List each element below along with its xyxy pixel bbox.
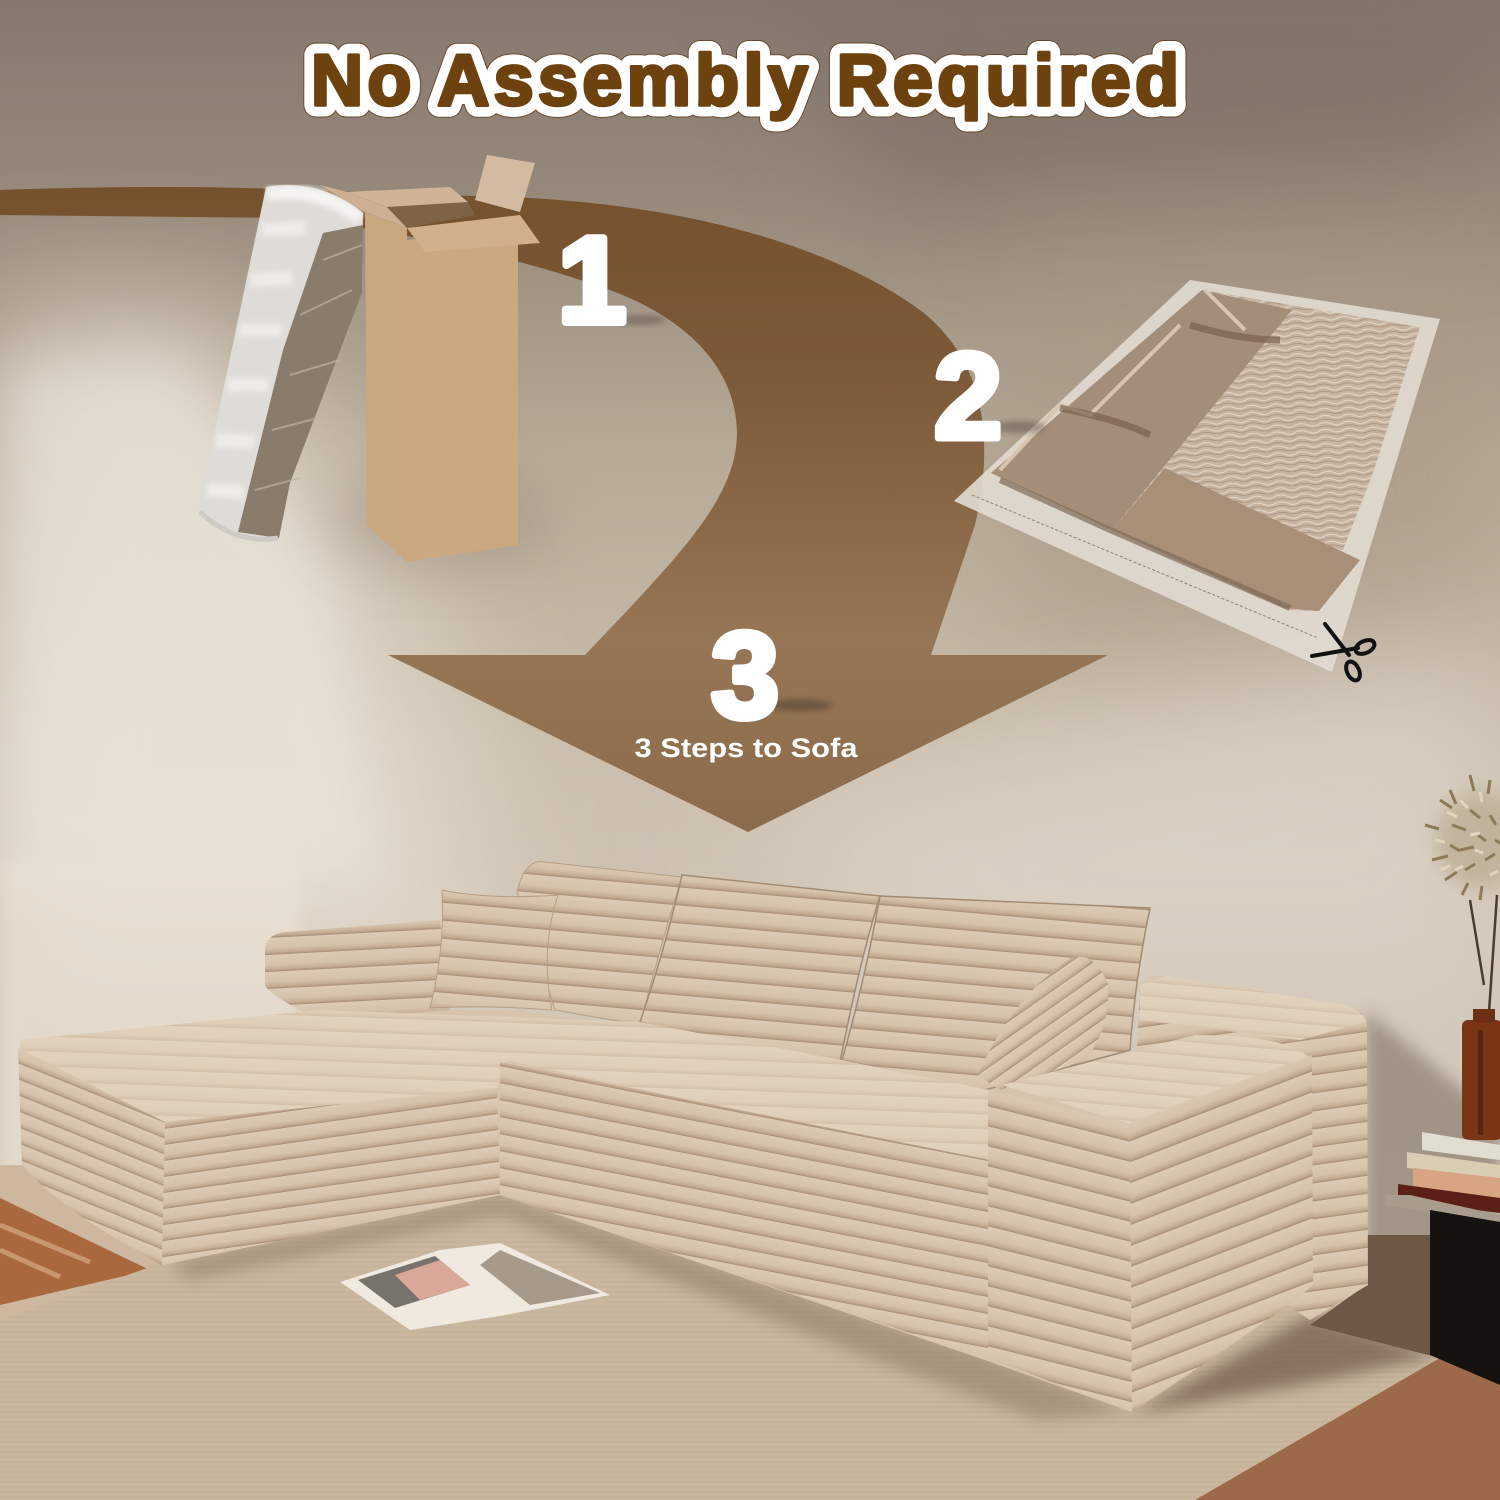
- step number 3: 3: [711, 607, 779, 743]
- seat top: [505, 1022, 990, 1165]
- step number 1: [558, 212, 666, 348]
- open magazine: [340, 1243, 610, 1330]
- side table with books and vase: [1385, 775, 1500, 1385]
- right armrest inner face: [988, 1090, 1132, 1412]
- far right back section: [1130, 976, 1368, 1320]
- title: No Assembly Required: [311, 41, 1179, 121]
- chaise front: [162, 1088, 500, 1265]
- arrow caption: 3 Steps to Sofa: [634, 733, 859, 763]
- title: No Assembly Required: [311, 41, 1179, 121]
- small pillow left: [430, 890, 558, 1010]
- step number 2: [934, 328, 1046, 464]
- silhouette base: [20, 1010, 1313, 1412]
- corduroy sofa: [18, 862, 1368, 1412]
- books: [1398, 1132, 1500, 1213]
- back cushion centre: [640, 875, 880, 1062]
- seat front: [500, 1062, 990, 1360]
- dried plant: [1425, 775, 1500, 1012]
- left armrest: [265, 920, 450, 1020]
- title: No Assembly Required: [311, 41, 1179, 121]
- step number 3: [711, 607, 832, 743]
- right armrest top: [1002, 1035, 1312, 1125]
- step number 1: 1: [558, 212, 626, 348]
- cardboard box: [320, 155, 540, 562]
- rolled sofa: [198, 185, 363, 539]
- arrow: curved path through three steps: [0, 187, 1108, 832]
- back cushion right: [842, 896, 1150, 1090]
- icon: scissors: [1312, 624, 1377, 683]
- floor and rugs: [0, 1165, 1500, 1500]
- step 2: vacuum sealed sofa: [954, 280, 1440, 683]
- chaise left side: [18, 1048, 165, 1265]
- step number 2: 2: [934, 328, 1002, 464]
- chaise top: [20, 1010, 640, 1122]
- vase: [1462, 1009, 1500, 1140]
- right armrest outer face: [1130, 1055, 1313, 1412]
- diagonal pillow right: [978, 957, 1108, 1090]
- step 1: rolled sofa and box: [198, 155, 550, 570]
- back cushion left: [517, 862, 682, 1025]
